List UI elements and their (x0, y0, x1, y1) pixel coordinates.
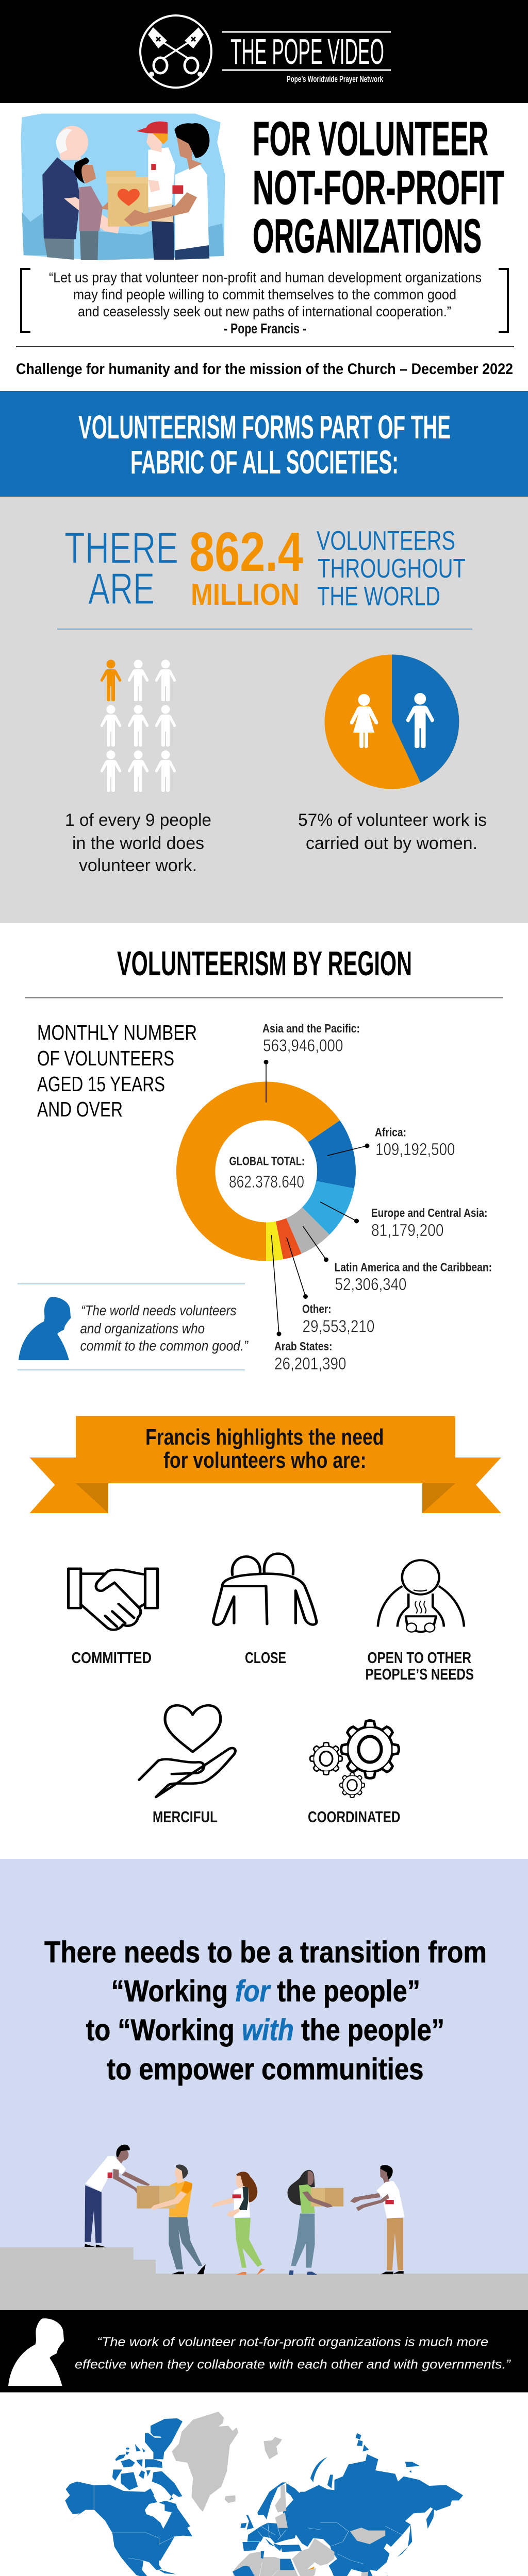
headline (44, 1936, 487, 2086)
region labels: 563,946,000 (263, 1036, 343, 1055)
icon: pope silhouette white (8, 2318, 64, 2386)
headline figure (64, 520, 466, 614)
header band (0, 0, 528, 103)
headline: to “Working with the people” (86, 2013, 444, 2047)
logo: crossed keys (140, 15, 211, 88)
ground and steps (0, 2247, 528, 2310)
white gaps (145, 2492, 172, 2529)
chart subtitle (37, 1021, 197, 1121)
figure: man in orange shirt (137, 2164, 206, 2274)
icon: gears (310, 1721, 399, 1798)
stat text: 57 percent: carried out by women. (306, 834, 477, 853)
illustration: volunteer chain (85, 2145, 405, 2275)
north america (65, 2482, 192, 2576)
world map: volunteering policies (65, 2412, 463, 2576)
title (253, 112, 504, 263)
chart subtitle: MONTHLY NUMBER (37, 1021, 197, 1044)
gray overlays (162, 2485, 419, 2576)
donut chart: volunteers by region (176, 1022, 492, 1373)
ribbon banner: for volunteers who are: (163, 1448, 366, 1473)
ribbon banner (30, 1416, 501, 1513)
figure: woman with green trousers (211, 2172, 266, 2275)
chart subtitle: OF VOLUNTEERS (37, 1046, 174, 1070)
icon: two people embracing (213, 1554, 317, 1625)
headline figure: VOLUNTEERS (317, 526, 455, 556)
icon: pope silhouette blue (19, 1297, 71, 1360)
headline figure: THE WORLD (317, 582, 440, 612)
ribbon banner: Francis highlights the need (145, 1425, 384, 1450)
region labels: 26,201,390 (274, 1354, 346, 1373)
wordmark (222, 31, 391, 84)
africa blue (233, 2551, 307, 2576)
prayer quote with brackets: and ceaselessly seek out new paths of international cooperation.” (78, 303, 451, 319)
region labels (262, 1022, 492, 1373)
region labels: Africa: (375, 1125, 406, 1139)
centre total: 862.378.640 (229, 1172, 304, 1191)
region labels: Latin America and the Caribbean: (334, 1260, 492, 1274)
blue heading band (0, 391, 528, 497)
hero illustration: volunteers handing a box (21, 114, 225, 260)
quote text: “The work of volunteer not-for-profit organizations is much more (97, 2335, 488, 2349)
stat text: 1 of 9: 1 of every 9 people (65, 810, 211, 830)
quote text: and organizations who (80, 1320, 205, 1336)
stat text: 1 of 9: volunteer work. (79, 856, 197, 875)
wordmark: THE POPE VIDEO (230, 31, 384, 72)
region labels: 81,179,200 (371, 1221, 443, 1240)
figure: man on steps (85, 2145, 150, 2247)
headline figure: 862.4 (189, 520, 303, 583)
figure: man receiving (350, 2165, 405, 2274)
region labels: Arab States: (274, 1340, 332, 1353)
prayer quote with brackets: may find people willing to commit themselves to the common good (73, 286, 456, 302)
leader lines (264, 1060, 369, 1336)
headline: “Working for the people” (111, 1974, 420, 2008)
wordmark: Pope’s Worldwide Prayer Network (287, 74, 383, 84)
southeast asia (358, 2575, 408, 2576)
borders (94, 2485, 402, 2576)
panel: statistics (0, 497, 528, 923)
icon: person with soup bowl (378, 1560, 464, 1632)
stat text: 57 percent (298, 810, 487, 853)
region labels: 29,553,210 (302, 1317, 374, 1335)
icon: heart over hand (139, 1705, 235, 1797)
quote text (80, 1302, 249, 1354)
chart subtitle: AND OVER (37, 1097, 123, 1121)
region labels: 109,192,500 (375, 1140, 455, 1159)
label: merciful: MERCIFUL (153, 1808, 218, 1826)
chart subtitle: AGED 15 YEARS (37, 1072, 165, 1096)
headline: to empower communities (107, 2053, 424, 2086)
quote text (75, 2335, 512, 2372)
region labels: Asia and the Pacific: (262, 1022, 360, 1035)
blue countries (65, 2418, 463, 2576)
quote text: “The world needs volunteers (81, 1302, 236, 1318)
prayer quote with brackets: - Pope Francis - (224, 320, 306, 336)
label: open to other people's needs: PEOPLE’S NEEDS (365, 1665, 474, 1683)
region labels: Other: (302, 1302, 331, 1316)
stat text: 1 of 9 (65, 810, 211, 875)
pictogram: 1 of 9 people (101, 659, 176, 792)
stat text: 1 of 9: in the world does (72, 834, 204, 853)
headline figure: THROUGHOUT (318, 554, 466, 584)
quote text: effective when they collaborate with each other and with governments.” (75, 2358, 512, 2372)
label: coordinated: COORDINATED (308, 1808, 400, 1826)
icon: handshake (69, 1569, 158, 1630)
centre total (229, 1154, 305, 1191)
orange countries (182, 2567, 315, 2576)
quote text: commit to the common good.” (80, 1337, 249, 1354)
russia and asia (282, 2454, 463, 2576)
gray landmasses (172, 2412, 450, 2576)
panel: transition (0, 1859, 528, 2310)
figure: woman carrying box (287, 2170, 343, 2275)
prayer quote with brackets: “Let us pray that volunteer non-profit and human development organizations (49, 269, 482, 285)
label: open to other people's needs (365, 1649, 474, 1683)
quote band: collaboration (0, 2310, 528, 2393)
callout: the world needs volunteers (18, 1284, 249, 1370)
prayer quote with brackets (21, 269, 508, 336)
headline figure: ARE (88, 565, 155, 614)
europe (240, 2482, 302, 2552)
pie chart: women share (325, 654, 459, 789)
label: committed: COMMITTED (71, 1649, 152, 1667)
stat text: 57 percent: 57% of volunteer work is (298, 810, 487, 830)
headline figure: MILLION (191, 578, 300, 612)
centre total: GLOBAL TOTAL: (229, 1154, 305, 1167)
label: open to other people's needs: OPEN TO OTHER (367, 1649, 471, 1667)
region labels: 52,306,340 (335, 1275, 406, 1294)
headline figure: THERE (64, 524, 178, 573)
label: close: CLOSE (245, 1649, 286, 1667)
region labels: Europe and Central Asia: (371, 1206, 488, 1219)
